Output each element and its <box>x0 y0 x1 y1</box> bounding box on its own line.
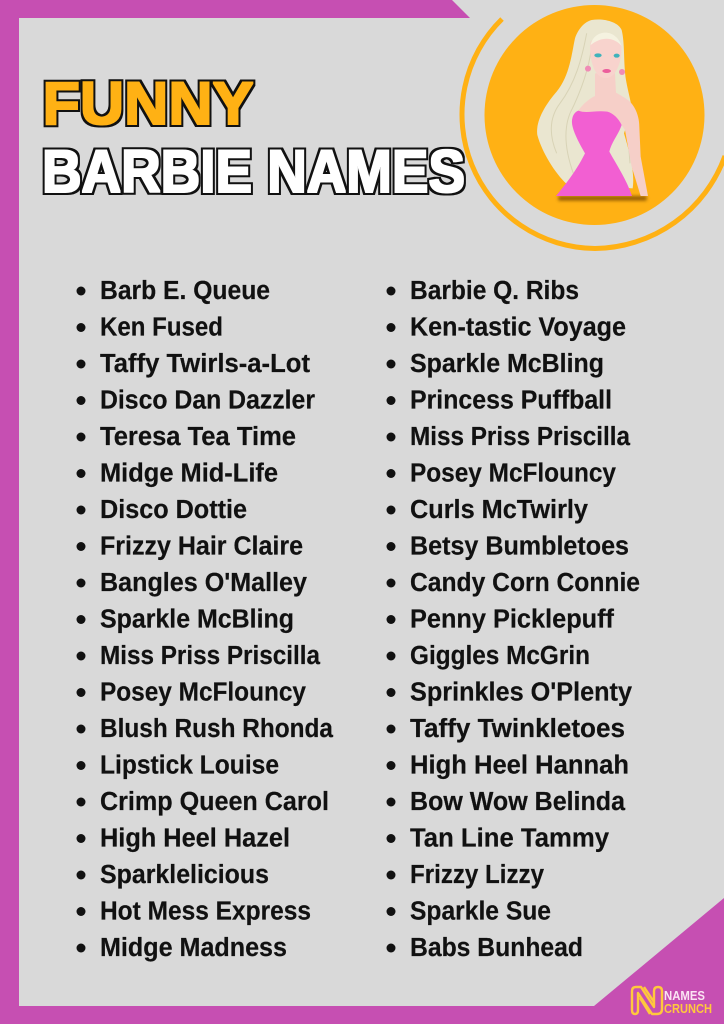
name labels: Tan Line Tammy <box>410 824 610 852</box>
name labels: Bangles O'Malley <box>100 569 308 597</box>
name labels: Miss Priss Priscilla <box>100 642 321 670</box>
name labels: Crimp Queen Carol <box>100 788 329 816</box>
bullets <box>386 286 396 952</box>
names list: right column <box>386 277 640 962</box>
doll lips <box>602 69 611 73</box>
doll hair band <box>591 33 622 46</box>
doll eyes <box>594 53 620 58</box>
orange circle <box>484 5 704 225</box>
doll pink dress <box>556 111 632 196</box>
name labels: Hot Mess Express <box>100 898 311 926</box>
name labels: Sparkle McBling <box>410 350 604 378</box>
name labels: Frizzy Lizzy <box>410 861 545 889</box>
name labels: Ken Fused <box>100 314 223 342</box>
name labels: Midge Madness <box>100 934 287 962</box>
name labels: Blush Rush Rhonda <box>100 715 334 743</box>
doll earrings <box>585 66 625 75</box>
doll arm and shoulders <box>578 73 648 196</box>
name labels: Sparklelicious <box>100 861 269 889</box>
name labels: Teresa Tea Time <box>100 423 296 451</box>
name labels: Babs Bunhead <box>410 934 583 962</box>
name labels: Bow Wow Belinda <box>410 788 626 816</box>
name labels: Penny Picklepuff <box>410 606 614 634</box>
name labels: Giggles McGrin <box>410 642 590 670</box>
title line: Funny: FUNNY <box>42 70 253 137</box>
title line: Barbie Names: BARBIE NAMES <box>42 138 465 205</box>
bullets <box>76 286 86 952</box>
name labels: Sparkle McBling <box>100 606 294 634</box>
name labels: Posey McFlouncy <box>100 678 307 706</box>
name labels: Frizzy Hair Claire <box>100 532 303 560</box>
name labels: High Heel Hazel <box>100 824 290 852</box>
doll face <box>590 38 621 78</box>
doll hair <box>537 19 633 188</box>
logo word: Crunch: CRUNCH <box>664 1002 712 1016</box>
name labels: Taffy Twinkletoes <box>410 715 625 743</box>
orange decorative ring <box>462 19 724 248</box>
names list: left column <box>76 277 334 962</box>
icon: Barbie doll illustration <box>537 19 648 201</box>
name labels: Betsy Bumbletoes <box>410 532 629 560</box>
name labels: Taffy Twirls-a-Lot <box>100 350 310 378</box>
logo word: Names: NAMES <box>664 989 705 1003</box>
icon: N logo mark <box>632 987 662 1014</box>
doll hair strands <box>551 33 630 173</box>
name labels: Miss Priss Priscilla <box>410 423 631 451</box>
name labels: High Heel Hannah <box>410 752 629 780</box>
name labels: Barb E. Queue <box>100 277 270 305</box>
name labels: Sparkle Sue <box>410 898 551 926</box>
name labels <box>100 277 334 962</box>
name labels: Curls McTwirly <box>410 496 589 524</box>
name labels: Disco Dan Dazzler <box>100 386 315 414</box>
name labels: Candy Corn Connie <box>410 569 640 597</box>
logo: Names Crunch <box>632 987 712 1016</box>
name labels: Sprinkles O'Plenty <box>410 678 633 706</box>
name labels: Disco Dottie <box>100 496 247 524</box>
name labels: Barbie Q. Ribs <box>410 277 579 305</box>
name labels: Posey McFlouncy <box>410 460 617 488</box>
name labels: Ken-tastic Voyage <box>410 314 626 342</box>
name labels <box>410 277 640 962</box>
doll shadow <box>558 196 647 201</box>
title <box>42 70 465 205</box>
name labels: Midge Mid-Life <box>100 460 278 488</box>
name labels: Princess Puffball <box>410 386 612 414</box>
name labels: Lipstick Louise <box>100 752 279 780</box>
